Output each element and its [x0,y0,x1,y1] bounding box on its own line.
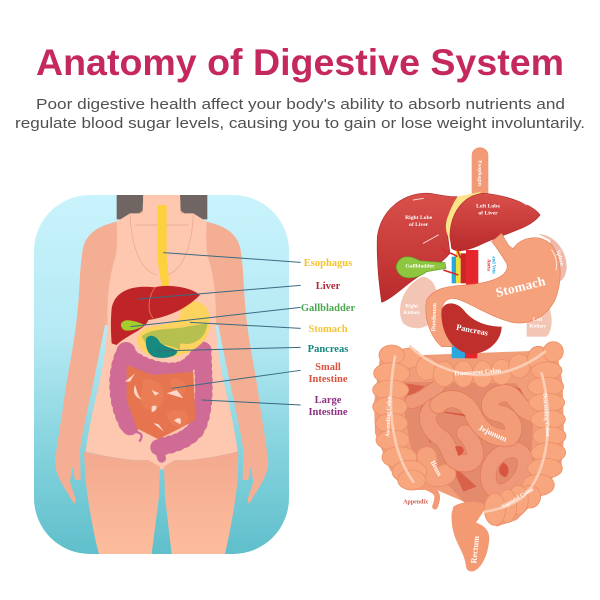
label: left kidney: Kidney [529,324,546,330]
colon bands [391,347,548,512]
left kidney [527,302,552,337]
label: left kidney: Left [533,317,542,323]
hair [117,195,207,219]
label: duodenum: Duodenum [431,303,438,332]
lower right loop [488,450,525,492]
small intestine highlights [140,378,188,427]
right leg [164,452,238,554]
organ labels [301,258,355,418]
gallbladder [396,257,446,278]
esophagus [472,147,488,201]
ligament [446,192,482,248]
label: spleen: Spleen [555,250,565,267]
label: ileum: Ileum [429,460,443,478]
label: esophagus: Esophagus [477,160,483,187]
jejunum tube [438,393,533,438]
stomach shadow [142,323,207,350]
rectum [452,502,489,571]
vessels [452,257,456,283]
label: stomach: Stomach [494,273,547,300]
appendix [135,432,142,442]
appendix [425,487,437,507]
panel: body diagram background [34,195,289,554]
label: ascending colon: Ascending Colon [385,395,393,437]
label: liver: Liver [316,281,341,292]
label: descending colon: Descending Colon [541,393,550,438]
large intestine [119,351,204,458]
label: right kidney: Kidney [403,310,420,316]
neckline [130,215,193,275]
label: appendix: Appendix [403,500,428,506]
jejunum and ileum loops [412,386,533,492]
label: left lobe of liver: of Liver [478,211,498,217]
label: esophagus: Esophagus [304,258,352,269]
right kidney [400,277,437,328]
liver [111,286,200,345]
organs in torso [111,205,210,458]
detailed digestive diagram [373,147,567,571]
small intestine gaps [125,373,183,432]
lower vessels [452,337,465,358]
left leg [84,452,160,554]
label: right lobe of liver: of Liver [409,222,429,228]
label: large intestine: Large [315,395,341,406]
label: sigmoid colon: Sigmoid Colon [501,487,536,510]
colon lobes [373,342,566,525]
spleen [538,234,567,281]
label: pancreas: Pancreas [455,323,490,338]
colon and intestine labels [385,367,550,564]
label: pancreas: Pancreas [308,344,348,355]
pointer lines [131,253,301,405]
dark gaps [405,383,533,492]
gallbladder [121,320,145,331]
bile ducts [442,247,461,275]
label: right kidney: Right [405,303,418,309]
label: gallbladder: Gallbladder [301,303,355,314]
liver right lobe [377,193,457,302]
arms and shoulders [55,195,268,504]
label: jejunum: Jejunum [477,423,509,444]
stomach [426,233,560,347]
small intestine [127,365,195,439]
colon silhouette [374,350,564,527]
label: small intestine: Intestine [308,374,348,385]
label: small intestine: Small [315,362,341,373]
illustration: female torso [55,195,268,554]
stomach [138,301,210,357]
label: rectum: Rectum [469,535,481,564]
stomach highlights [387,198,557,270]
label: right lobe of liver: Right Lobe [405,215,432,221]
top left tube [412,386,438,402]
subtitle [15,96,585,132]
label: gallbladder: Gallbladder [405,264,435,270]
pancreas [441,303,502,354]
neck [142,195,181,214]
liver left lobe [450,193,540,251]
ileum [427,457,446,477]
subtitle: Poor digestive health affect your body's ability to absorb nutrients and [36,96,565,113]
inner looping tube [428,405,475,463]
pancreas [146,336,177,358]
subtitle: regulate blood sugar levels, causing you to gain or lose weight involuntarily. [15,115,585,132]
small intestine base [403,382,533,505]
label: aorta and vein: and Vein [490,256,495,274]
title: Anatomy of Digestive System [36,42,564,83]
esophagus [157,205,169,286]
liver lobe line [149,287,155,318]
label: large intestine: Intestine [308,407,348,418]
label: aorta and vein: Aorta [485,259,490,271]
tank top torso [86,213,238,470]
label: left lobe of liver: Left Lobe [476,204,500,210]
label: transverse colon: Transverse Colon [453,367,502,378]
labels [403,160,565,338]
teardrop gaps [444,412,509,477]
label: stomach: Stomach [308,324,348,335]
